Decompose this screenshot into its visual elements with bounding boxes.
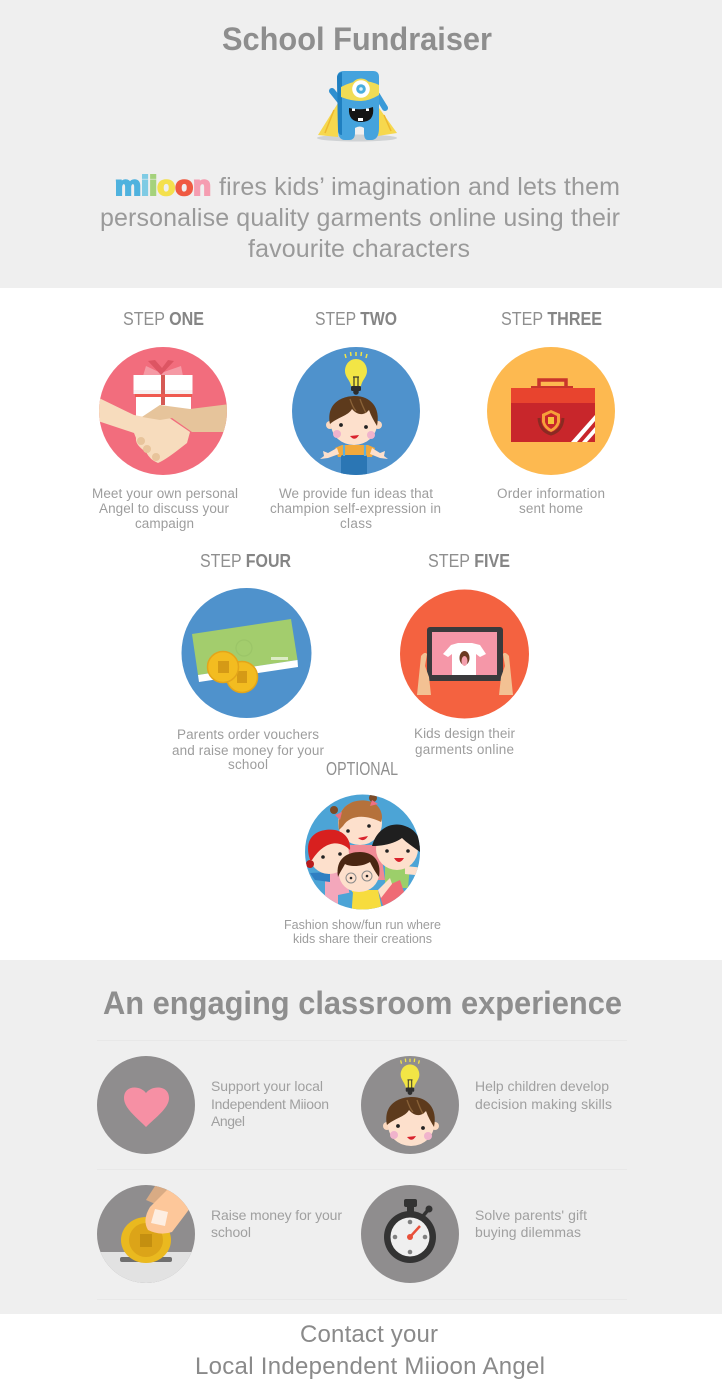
description: step four [172,727,324,772]
title: School Fundraiser [222,21,492,57]
icon: child head with bulb [361,1056,459,1154]
text: raise money [211,1207,342,1240]
description: step two: class [340,516,372,531]
description: step one: Angel to discuss your [99,501,230,516]
text block: intro [100,173,620,263]
description: step three: sent home [519,501,583,516]
icon: tablet with t-shirt design [400,590,529,718]
text: raise money: school [211,1224,251,1240]
description: step two [270,486,441,531]
description: step four: Parents order vouchers [177,727,319,742]
heading: step five: STEP FIVE [428,551,510,571]
icon: child with light bulb [292,347,420,479]
text: support: Independent Miioon [211,1096,329,1112]
text: support: Angel [211,1113,245,1129]
description: optional step: kids share their creations [293,932,432,946]
panel: contact background [0,1314,722,1393]
text block: contact: Local Independent Miioon Angel [195,1353,545,1380]
icon: red school case [487,347,615,475]
text: gift dilemmas: buying dilemmas [475,1224,581,1240]
text: support [211,1078,329,1129]
panel: header background [0,0,722,288]
description: step four: school [228,757,268,772]
text: decision making: decision making skills [475,1096,612,1112]
text: support: Support your local [211,1078,323,1094]
heading: optional: OPTIONAL [326,759,398,779]
heading: step two: STEP TWO [315,309,397,329]
heading: step one: STEP ONE [123,309,204,329]
text: gift dilemmas [475,1207,587,1240]
text block: contact [195,1321,545,1380]
benefit: decision making [361,1056,612,1154]
text block: intro: fires kids’ imagination and lets them [219,173,620,201]
panel: step five [400,551,529,757]
panel: classroom experience background [0,960,722,1314]
benefit: raise money [97,1183,342,1284]
text: decision making: Help children develop [475,1078,609,1094]
description: step one: campaign [135,516,194,531]
text: decision making [475,1078,612,1112]
benefit: support your angel [97,1056,329,1154]
text: gift dilemmas: Solve parents' gift [475,1207,587,1223]
panel: step four [172,551,324,772]
description: step three [497,486,605,516]
panel: step two [270,309,441,531]
logo: miioon wordmark: miioon [115,170,211,201]
icon: voucher and coins [182,588,312,718]
icon: coin dropped in slot [97,1183,195,1284]
description: step three: Order information [497,486,605,501]
description: step four: and raise money for your [172,743,324,758]
description: optional step [284,918,441,946]
icon: heart [97,1056,195,1154]
description: optional step: Fashion show/fun run where [284,918,441,932]
text block: intro: personalise quality garments online using their [100,204,620,232]
panel: step three [487,309,615,516]
heading: classroom experience: An engaging classroom experience [103,985,622,1021]
panel: steps background [0,288,722,960]
icon: handshake and gift [95,347,230,475]
description: step five: Kids design their [414,726,516,741]
text block: contact: Contact your [300,1321,438,1348]
panel: step one [92,309,238,531]
description: step one [92,486,238,531]
description: step one: Meet your own personal [92,486,238,501]
panel: optional step [284,759,441,946]
heading: step four: STEP FOUR [200,551,291,571]
text block: intro: favourite characters [248,235,470,263]
description: step five: garments online [415,742,514,757]
benefit: gift dilemmas [361,1185,587,1283]
description: step five [414,726,516,757]
icon: group of children [305,794,425,912]
icon: caped monster mascot [317,71,397,142]
icon: stopwatch [361,1185,459,1283]
heading: step three: STEP THREE [501,309,602,329]
description: step two: We provide fun ideas that [279,486,433,501]
text: raise money: Raise money for your [211,1207,342,1223]
description: step two: champion self-expression in [270,501,441,516]
